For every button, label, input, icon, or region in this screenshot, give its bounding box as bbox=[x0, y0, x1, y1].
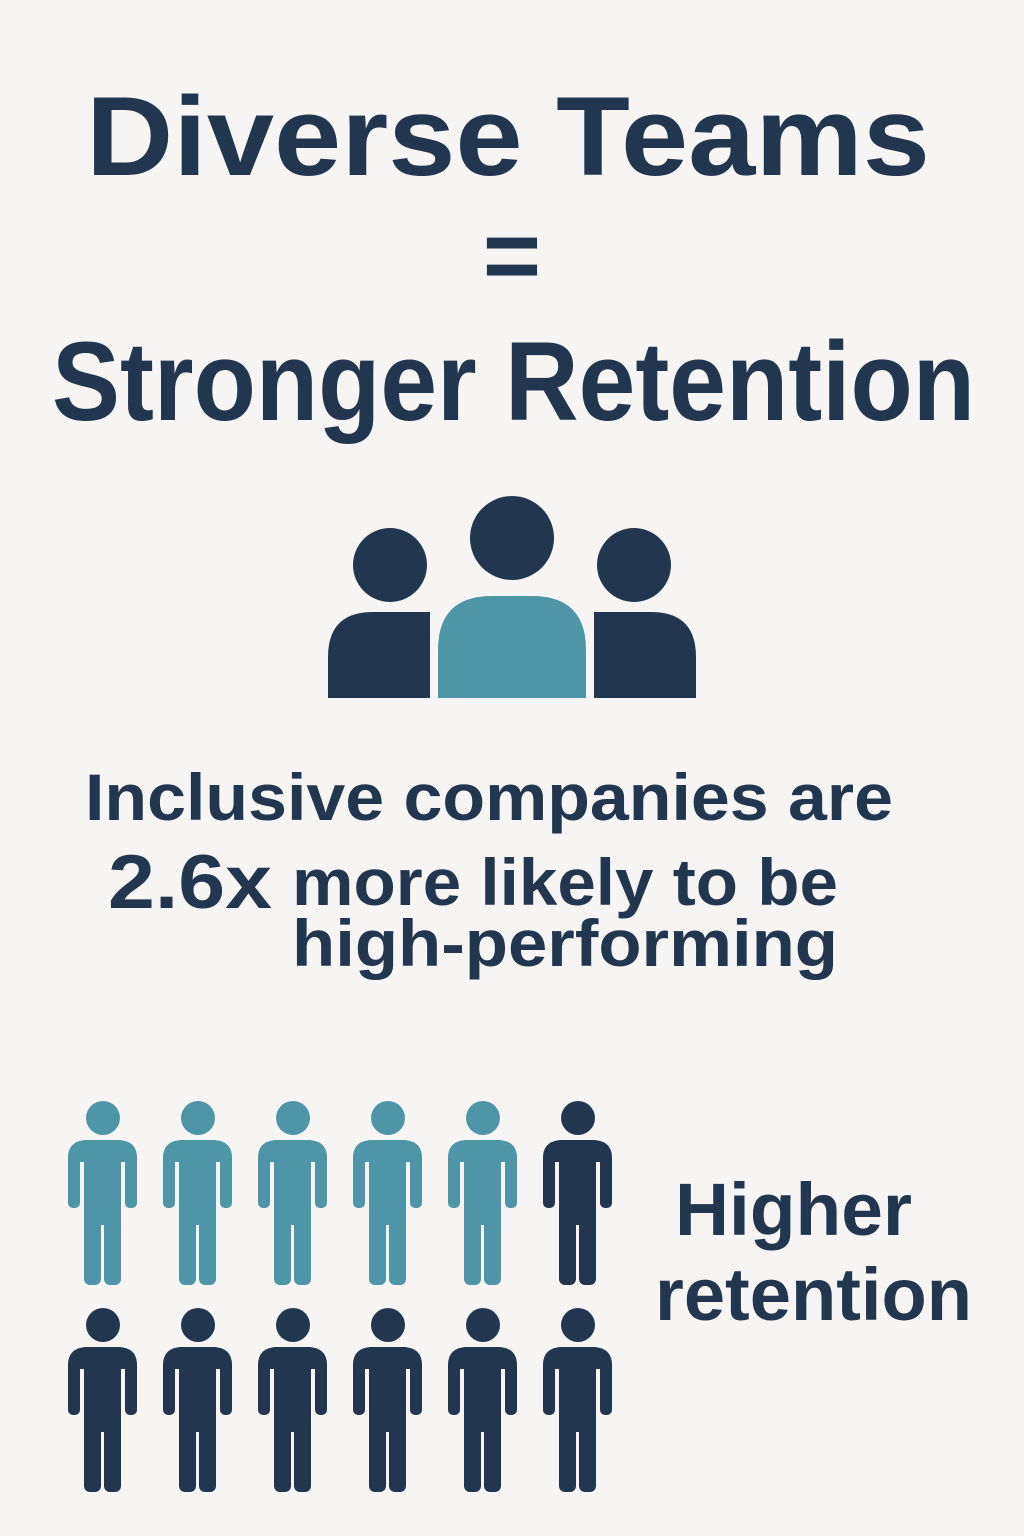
pictogram: people grid bbox=[68, 1101, 612, 1492]
statistic text: more likely to be bbox=[292, 845, 838, 919]
label: higher retention bbox=[655, 1168, 972, 1336]
label: higher retention: Higher bbox=[675, 1168, 912, 1251]
icon: team group bbox=[328, 496, 696, 698]
statistic text bbox=[85, 760, 893, 980]
title bbox=[52, 74, 975, 444]
statistic text: Inclusive companies are bbox=[85, 760, 893, 834]
statistic text: 2.6x bbox=[108, 840, 272, 925]
title: = bbox=[483, 200, 541, 312]
label: higher retention: retention bbox=[655, 1253, 972, 1336]
title: Diverse Teams bbox=[86, 74, 930, 199]
statistic text: high-performing bbox=[292, 906, 838, 980]
